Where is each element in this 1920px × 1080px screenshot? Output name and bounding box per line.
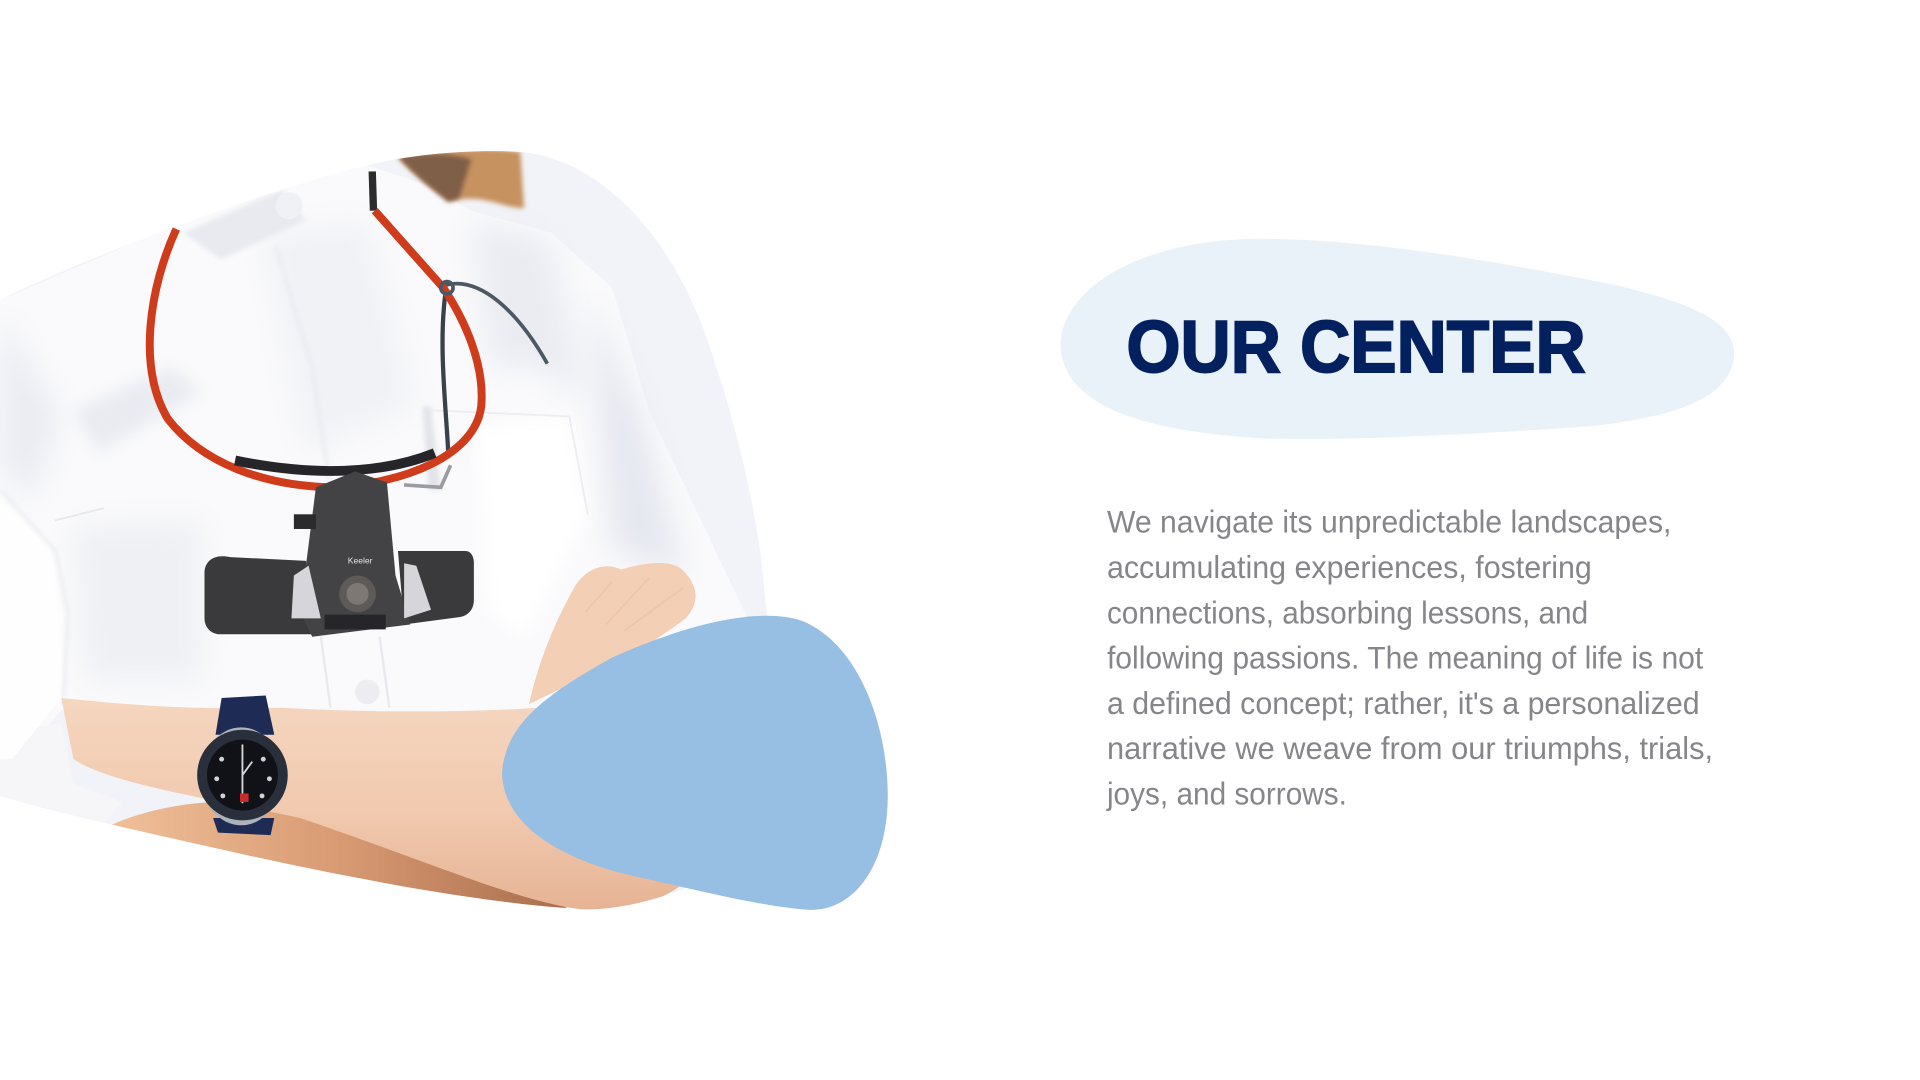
- body paragraph: following passions. The meaning of life is not: [1107, 640, 1703, 676]
- body paragraph: joys, and sorrows.: [1106, 775, 1347, 811]
- arms and hand: [61, 563, 696, 912]
- decorative blue blob: [502, 616, 888, 910]
- body paragraph: narrative we weave from our triumphs, trials,: [1107, 730, 1713, 766]
- wristwatch: [197, 696, 288, 835]
- loupe straps and cables: [150, 171, 547, 487]
- photo: doctor with crossed arms and headlight loupes: [0, 135, 808, 931]
- headlight device: [204, 471, 474, 637]
- body paragraph: accumulating experiences, fostering: [1107, 549, 1592, 585]
- shirt: [0, 166, 746, 759]
- body paragraph: We navigate its unpredictable landscapes,: [1107, 504, 1671, 540]
- body paragraph: [1106, 504, 1713, 811]
- body paragraph: connections, absorbing lessons, and: [1107, 594, 1588, 630]
- hair: [398, 149, 524, 208]
- device brand label: Keeler: [348, 555, 373, 565]
- body paragraph: a defined concept; rather, it's a personalized: [1107, 685, 1700, 721]
- title: OUR CENTER: [1127, 305, 1586, 388]
- title background blob: [1060, 239, 1734, 439]
